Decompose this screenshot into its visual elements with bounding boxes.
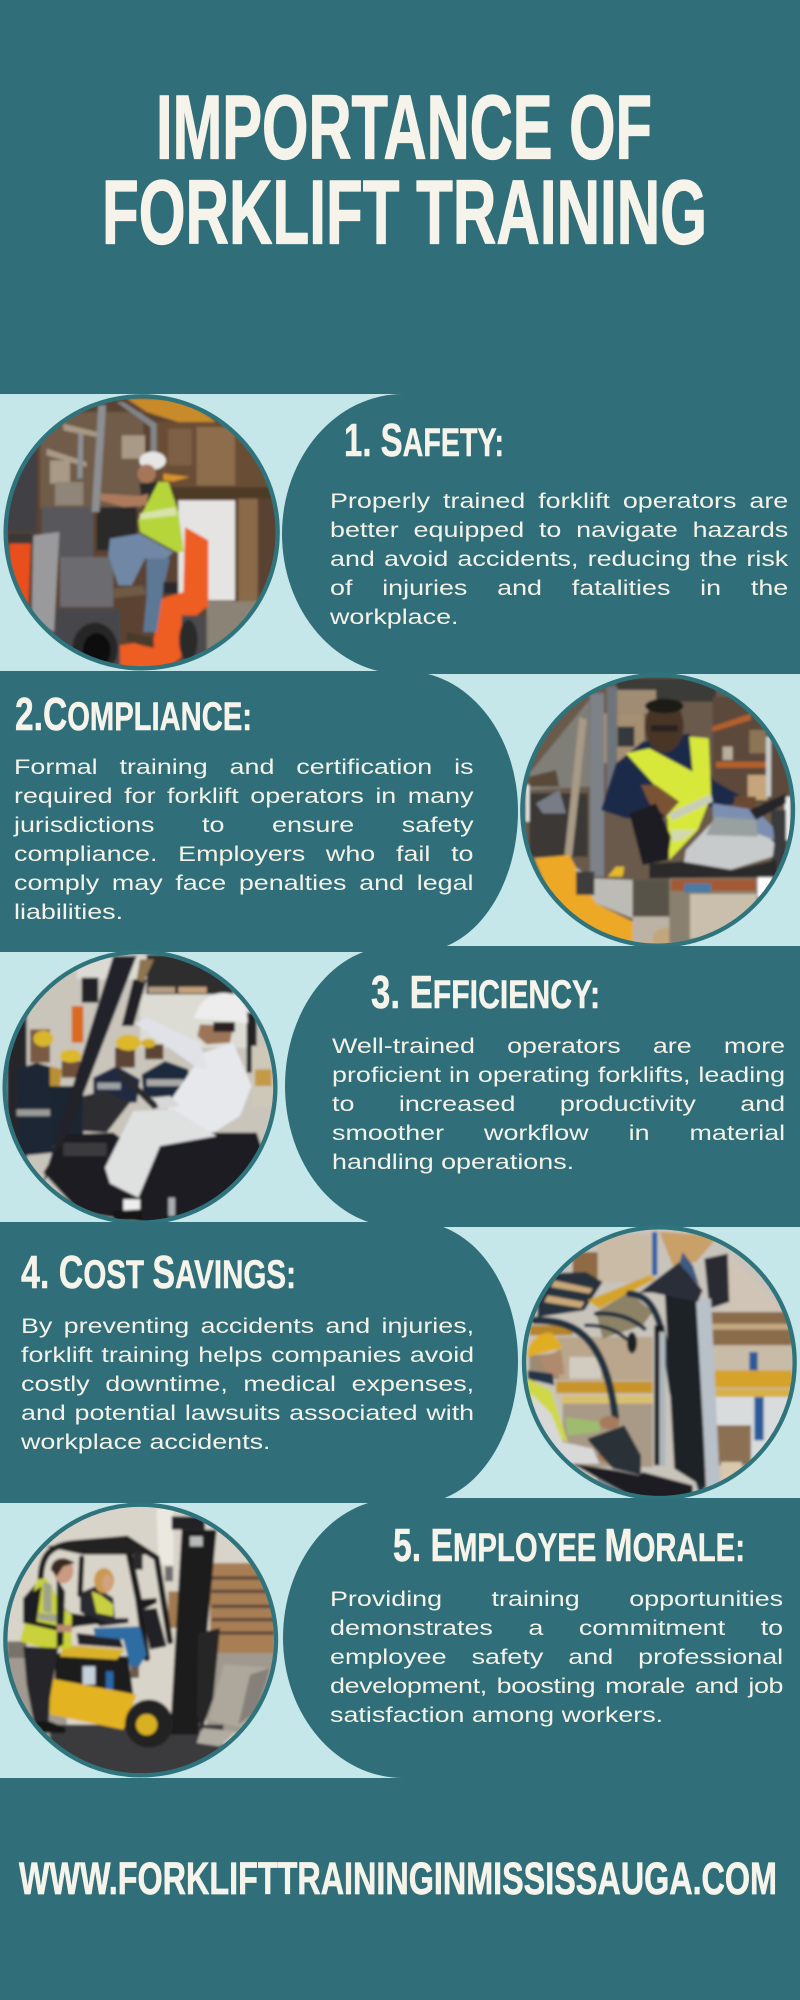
text: safety description: [330, 490, 788, 629]
photo: two workers with yellow forklift: [3, 1503, 278, 1778]
text: cost savings description: costly downtime, medical expenses,: [20, 1373, 474, 1396]
photo: operator in yellow vest on forklift: [520, 674, 796, 946]
text: compliance description: required for forklift operators in many: [14, 785, 474, 808]
text: employee morale description: Providing training opportunities: [330, 1588, 783, 1611]
text: safety description: workplace.: [330, 606, 458, 629]
text: cost savings description: and potential lawsuits associated with: [20, 1402, 474, 1425]
photo: instructor in white coveralls on forklift with trainees: [2, 952, 278, 1222]
heading: 5. Employee Morale: 5. EMPLOYEE MORALE:: [393, 1519, 745, 1571]
photo: operator driving forklift in warehouse aisle: [522, 1227, 797, 1498]
text: compliance description: jurisdictions to ensure safety: [14, 814, 474, 837]
text: compliance description: compliance. Employers who fail to: [14, 843, 474, 866]
text: efficiency description: proficient in operating forklifts, leading: [332, 1064, 785, 1087]
panel: 2 compliance: [13, 674, 800, 946]
panel: 3 efficiency: [0, 952, 785, 1222]
text: efficiency description: to increased productivity and: [332, 1093, 785, 1116]
text: employee morale description: [330, 1588, 783, 1727]
text: cost savings description: forklift training helps companies avoid: [20, 1344, 474, 1367]
heading: 3. Efficiency: 3. EFFICIENCY:: [371, 966, 600, 1018]
text: employee morale description: satisfaction among workers.: [330, 1704, 663, 1727]
text: safety description: of injuries and fatalities in the: [330, 577, 788, 600]
text: employee morale description: development, boosting morale and job: [330, 1675, 783, 1698]
text: compliance description: comply may face penalties and legal: [14, 872, 474, 895]
text: safety description: and avoid accidents, reducing the risk: [330, 548, 788, 571]
title: [102, 78, 707, 264]
text: employee morale description: employee safety and professional: [330, 1646, 783, 1669]
text: cost savings description: By preventing accidents and injuries,: [20, 1315, 474, 1338]
panel: 5 employee morale: [0, 1503, 783, 1778]
text: efficiency description: [332, 1035, 785, 1174]
text: compliance description: liabilities.: [14, 901, 123, 924]
heading: 1. Safety: 1. SAFETY:: [344, 414, 504, 466]
text: cost savings description: workplace accidents.: [20, 1431, 270, 1454]
panel: 4 cost savings: [20, 1227, 800, 1498]
text: safety description: better equipped to navigate hazards: [330, 519, 788, 542]
text: efficiency description: handling operations.: [332, 1151, 574, 1174]
text: safety description: Properly trained forklift operators are: [330, 490, 788, 513]
text: efficiency description: smoother workflow in material: [332, 1122, 785, 1145]
heading: 4. Cost Savings: 4. COST SAVINGS:: [21, 1246, 296, 1298]
text: efficiency description: Well-trained operators are more: [332, 1035, 785, 1058]
heading: 2. Compliance: 2.COMPLIANCE:: [15, 688, 252, 740]
photo: operator climbing onto orange forklift: [4, 394, 280, 670]
text: cost savings description: [20, 1315, 474, 1454]
text: compliance description: Formal training and certification is: [14, 756, 474, 779]
panel: 1 safety: [0, 394, 788, 671]
text: compliance description: [13, 756, 474, 924]
text: employee morale description: demonstrates a commitment to: [330, 1617, 783, 1640]
